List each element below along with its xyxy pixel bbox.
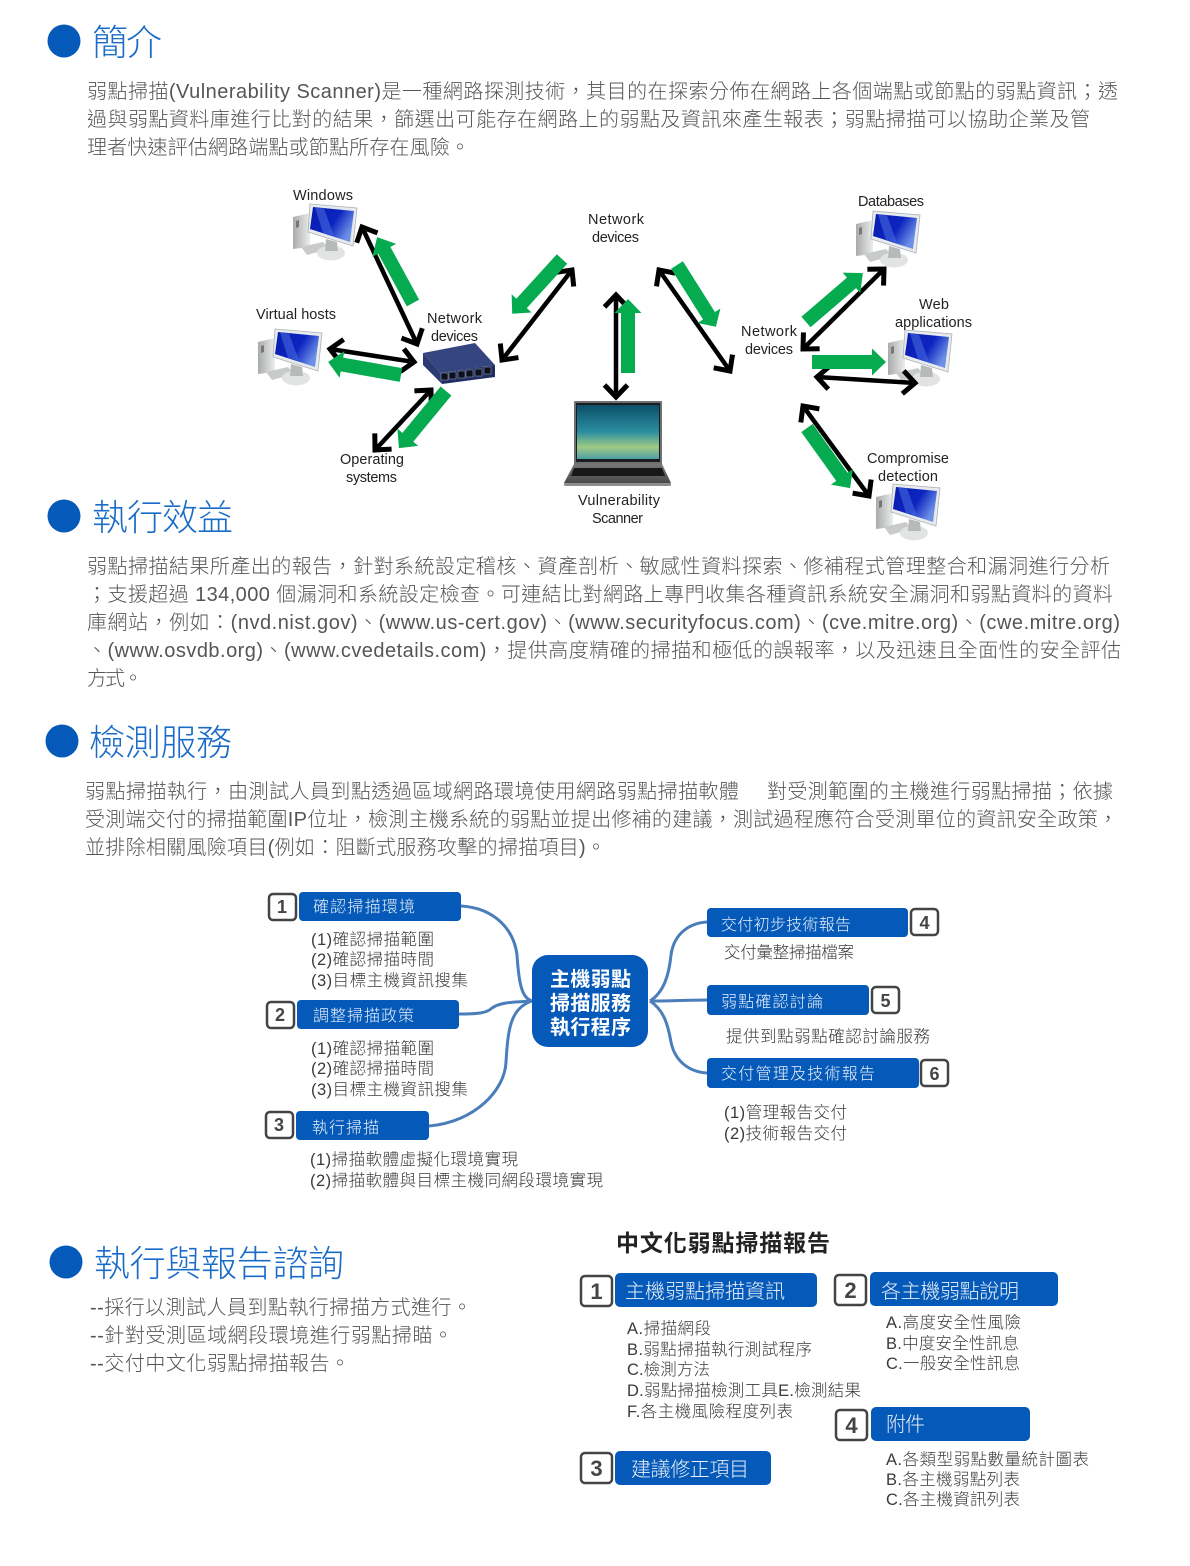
section: execution and report consulting [50,1243,472,1375]
step 2: 2 [275,1005,285,1025]
text block: benefits: 庫網站，例如：(nvd.nist.gov)、(www.us-cert.gov)、(www.securityfocus.com)、(cve.mitre.org)、(cwe.mitre.org) [87,611,1120,634]
step 4: 交付初步技術報告 [721,916,851,934]
report item 1 [581,1273,861,1421]
bullet: execution and report [50,1246,82,1278]
report item 1: 1 [590,1279,603,1304]
diagram labels: Operating [340,452,404,468]
report item 1: B.弱點掃描執行測試程序 [627,1340,812,1359]
text block: benefits: 弱點掃描結果所產出的報告，針對系統設定稽核、資產剖析、敏感性資料探索、修補程式管理整合和漏洞進行分析 [87,555,1110,578]
network diagram [256,188,972,540]
step 1: (1)確認掃描範圍 [311,930,434,949]
text block: introduction: 過與弱點資料庫進行比對的結果，篩選出可能存在網路上的弱點及資訊來產生報表；弱點掃描可以協助企業及管 [87,108,1090,131]
diagram labels: devices [431,329,478,345]
step 5 [707,985,930,1046]
text block: benefits: 方式。 [87,667,143,690]
text block: benefits [87,555,1121,690]
bullet: introduction [48,24,80,58]
icon: Databases computer [856,211,920,268]
arrows: green scan direction [326,231,886,496]
report item 1: 主機弱點掃描資訊 [625,1280,785,1303]
icon: laptop [564,401,671,486]
diagram labels: detection [878,469,938,485]
icon: network switch [423,343,495,384]
diagram labels [256,188,972,527]
diagram labels: Network [741,324,798,340]
report item 4: 附件 [886,1413,925,1436]
step 3 [266,1111,603,1190]
report item 1: F.各主機風險程度列表 [627,1402,793,1421]
step 6: (1)管理報告交付 [724,1103,847,1122]
step 6: 6 [929,1064,940,1084]
step 3: 3 [274,1115,284,1135]
report item 2: A.高度安全性風險 [886,1313,1021,1332]
diagram labels: Virtual hosts [256,307,336,323]
report item 1: D.弱點掃描檢測工具E.檢測結果 [627,1381,861,1400]
center node: 執行程序 [550,1015,631,1039]
step 6: (2)技術報告交付 [724,1124,847,1143]
section: testing service [46,722,1118,859]
text block: execution and report: --針對受測區域網段環境進行弱點掃瞄。 [90,1324,453,1347]
center node [532,955,648,1047]
text block: testing service [85,780,1118,859]
diagram labels: systems [346,470,397,486]
diagram labels: Web [919,297,949,313]
report item 1: A.掃描網段 [627,1319,711,1338]
report item 2: 2 [844,1278,857,1303]
diagram labels: Network [588,212,645,228]
diagram labels: Vulnerability [578,493,661,509]
step 1: (3)目標主機資訊搜集 [311,971,468,990]
text block: introduction: 弱點掃描(Vulnerability Scanner)是一種網路探測技術，其目的在探索分佈在網路上各個端點或節點的弱點資訊；透 [87,80,1118,103]
diagram labels: Network [427,311,483,327]
report item 4: 4 [845,1413,858,1438]
text block: execution and report [90,1296,472,1375]
step 3: 執行掃描 [312,1119,379,1137]
diagram labels: applications [895,315,972,331]
report item 3 [581,1451,771,1485]
section: benefits [48,497,1121,690]
text block: execution and report: --採行以測試人員到點執行掃描方式進行。 [90,1296,472,1319]
step 3: (1)掃描軟體虛擬化環境實現 [310,1150,518,1169]
center node: 掃描服務 [550,992,631,1015]
step 6 [707,1058,948,1143]
report item 2: B.中度安全性訊息 [886,1334,1019,1353]
heading: benefits: 執行效益 [92,497,233,538]
step 1: (2)確認掃描時間 [311,950,434,969]
icon: Windows computer [293,204,357,260]
report item 3: 建議修正項目 [631,1458,749,1481]
heading: testing service: 檢測服務 [89,722,232,763]
heading: introduction: 簡介 [92,22,162,63]
report item 2 [835,1272,1058,1373]
diagram labels: Scanner [592,511,643,527]
icon: Virtual hosts computer [258,329,322,386]
text block: benefits: ；支援超過 134,000 個漏洞和系統設定檢查。可連結比對網路上專門收集各種資訊系統安全漏洞和弱點資料的資料 [87,583,1113,606]
report item 4 [836,1407,1089,1509]
icon: Compromise detection computer [876,484,940,540]
bullet: testing service [46,724,78,758]
text block: testing service: 弱點掃描執行，由測試人員到點透過區域網路環境使用網路弱點掃描軟體 [85,780,739,803]
step 2: 調整掃描政策 [313,1007,414,1025]
report item 2: 各主機弱點說明 [881,1280,1019,1303]
diagram labels: devices [745,342,793,358]
step 2: (1)確認掃描範圍 [311,1039,434,1058]
step 5: 5 [880,991,891,1011]
section: introduction [48,22,1118,159]
step 6: 交付管理及技術報告 [721,1065,875,1083]
heading: execution and report: 執行與報告諮詢 [94,1243,344,1284]
diagram labels: Databases [858,194,924,210]
report item 4: B.各主機弱點列表 [886,1470,1020,1489]
diagram labels: Compromise [867,451,949,467]
text block: execution and report: --交付中文化弱點掃描報告。 [90,1352,350,1375]
text block: introduction [87,80,1118,159]
report contents panel [581,1230,1089,1509]
text block: introduction: 理者快速評估網路端點或節點所存在風險。 [87,136,470,159]
report item 3: 3 [590,1456,603,1481]
step 1: 確認掃描環境 [313,898,415,916]
icon: Web applications computer [888,330,952,386]
step 4: 4 [919,913,930,933]
report item 4: C.各主機資訊列表 [886,1490,1020,1509]
report item 4: A.各類型弱點數量統計圖表 [886,1450,1089,1469]
report item 2: C.一般安全性訊息 [886,1354,1020,1373]
text block: testing service: 對受測範圍的主機進行弱點掃描；依據 [767,780,1113,803]
flow chart: host scan procedure [266,892,948,1190]
text block: benefits: 、(www.osvdb.org)、(www.cvedetails.com)，提供高度精確的掃描和極低的誤報率，以及迅速且全面性的安全評估 [87,639,1121,662]
step 1 [269,892,468,990]
step 4 [707,908,938,962]
center node: 主機弱點 [550,968,631,991]
diagram labels: devices [592,230,639,246]
bullet: benefits [48,500,80,532]
diagram labels: Windows [293,188,353,204]
text block: testing service: 受測端交付的掃描範圍IP位址，檢測主機系統的弱點並提出修補的建議，測試過程應符合受測單位的資訊安全政策， [85,808,1118,831]
step 1: 1 [277,897,287,917]
step 4: 交付彙整掃描檔案 [724,943,854,962]
report title: 中文化弱點掃描報告 [616,1230,830,1256]
step 5: 弱點確認討論 [721,993,823,1011]
step 2 [267,1000,468,1099]
step 2: (3)目標主機資訊搜集 [311,1080,468,1099]
text block: testing service: 並排除相關風險項目(例如：阻斷式服務攻擊的掃描項目)。 [85,836,606,859]
step 3: (2)掃描軟體與目標主機同網段環境實現 [310,1171,603,1190]
step 2: (2)確認掃描時間 [311,1059,434,1078]
step 5: 提供到點弱點確認討論服務 [726,1027,930,1046]
report item 1: C.檢測方法 [627,1360,710,1379]
connectors [429,906,707,1126]
arrows: data flow [330,227,915,496]
